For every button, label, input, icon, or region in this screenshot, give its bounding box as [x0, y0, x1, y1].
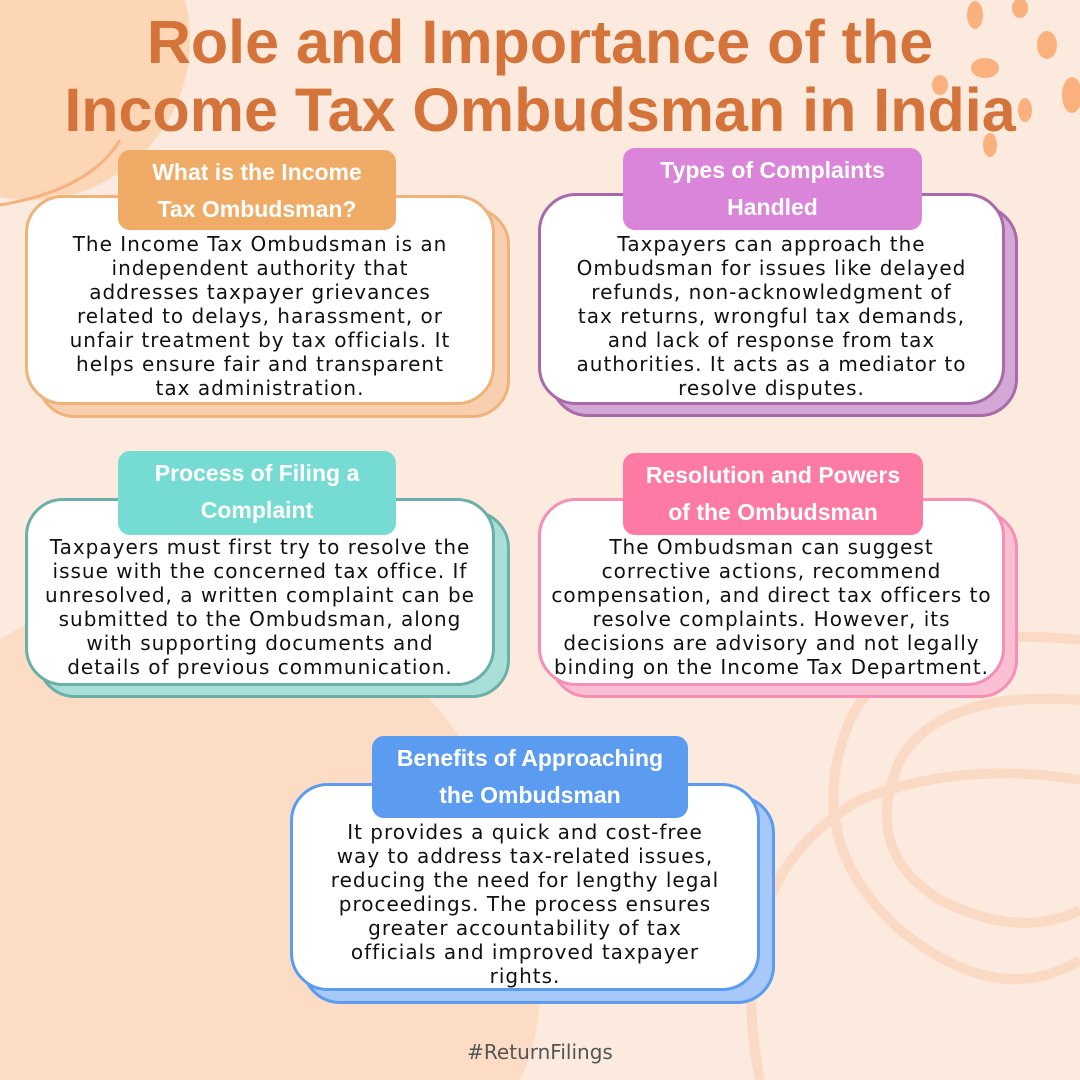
panel: types of complaints: refunds, non-acknowledgment of — [591, 280, 952, 304]
panel: process of filing: details of previous communication. — [67, 655, 453, 679]
panel: what is the ombudsman: The Income Tax Ombudsman is an — [73, 232, 447, 256]
panel: types of complaints: tax returns, wrongful tax demands, — [578, 304, 965, 328]
title: Income Tax Ombudsman in India — [64, 76, 1016, 144]
panel: types of complaints: Ombudsman for issues like delayed — [577, 256, 966, 280]
panel: resolution and powers: binding on the Income Tax Department. — [554, 655, 989, 679]
panel: resolution and powers: compensation, and direct tax officers to — [551, 583, 992, 607]
panel: benefits: officials and improved taxpayer — [351, 940, 699, 964]
panel: what is the ombudsman: unfair treatment by tax officials. It — [70, 328, 450, 352]
panel: resolution and powers: decisions are advisory and not legally — [563, 631, 980, 655]
panel: process of filing: issue with the concerned tax office. If — [53, 559, 467, 583]
panel: resolution and powers — [538, 453, 1018, 698]
panel: what is the ombudsman — [25, 150, 510, 418]
panel: benefits: proceedings. The process ensures — [339, 892, 711, 916]
panel: process of filing: submitted to the Ombudsman, along — [59, 607, 461, 631]
title — [64, 8, 1016, 144]
panel: process of filing — [25, 451, 510, 698]
panel: process of filing: with supporting documents and — [86, 631, 434, 655]
panel: what is the ombudsman: related to delays, harassment, or — [77, 304, 443, 328]
panel: what is the ombudsman: addresses taxpayer grievances — [89, 280, 431, 304]
heading: What is the Income — [152, 159, 362, 185]
heading: the Ombudsman — [439, 782, 621, 808]
panel: resolution and powers: resolve complaints. However, its — [592, 607, 951, 631]
panel: types of complaints: authorities. It acts as a mediator to — [577, 352, 966, 376]
heading: Complaint — [201, 497, 313, 523]
panel: what is the ombudsman: independent authority that — [112, 256, 408, 280]
panel: what is the ombudsman: tax administration. — [156, 376, 364, 400]
title: Role and Importance of the — [147, 8, 933, 76]
panel: what is the ombudsman: helps ensure fair and transparent — [76, 352, 444, 376]
heading: Benefits of Approaching — [397, 745, 663, 771]
panel: types of complaints — [538, 148, 1018, 417]
panel: benefits: greater accountability of tax — [368, 916, 682, 940]
heading: Tax Ombudsman? — [158, 196, 356, 222]
panel: benefits: reducing the need for lengthy legal — [331, 868, 719, 892]
panel: benefits: rights. — [490, 964, 560, 988]
panel: resolution and powers: The Ombudsman can suggest — [609, 535, 934, 559]
heading — [118, 150, 396, 230]
heading: Handled — [727, 194, 818, 220]
panel: types of complaints: Taxpayers can approach the — [617, 232, 926, 256]
hashtag footer: #ReturnFilings — [467, 1040, 613, 1064]
panel: process of filing: unresolved, a written complaint can be — [45, 583, 475, 607]
panel: resolution and powers: corrective actions, recommend — [602, 559, 941, 583]
panel: types of complaints: resolve disputes. — [678, 376, 865, 400]
heading: Process of Filing a — [155, 460, 359, 486]
panel: benefits — [290, 736, 775, 1004]
heading: Types of Complaints — [660, 157, 885, 183]
heading — [118, 451, 396, 535]
panel: benefits: way to address tax-related issues, — [337, 844, 713, 868]
panel: benefits: It provides a quick and cost-free — [347, 820, 703, 844]
heading — [623, 148, 922, 230]
heading — [372, 736, 688, 818]
heading — [623, 453, 923, 535]
panel: types of complaints: and lack of response from tax — [608, 328, 935, 352]
heading: of the Ombudsman — [668, 499, 878, 525]
panel: process of filing: Taxpayers must first try to resolve the — [50, 535, 470, 559]
heading: Resolution and Powers — [646, 462, 900, 488]
